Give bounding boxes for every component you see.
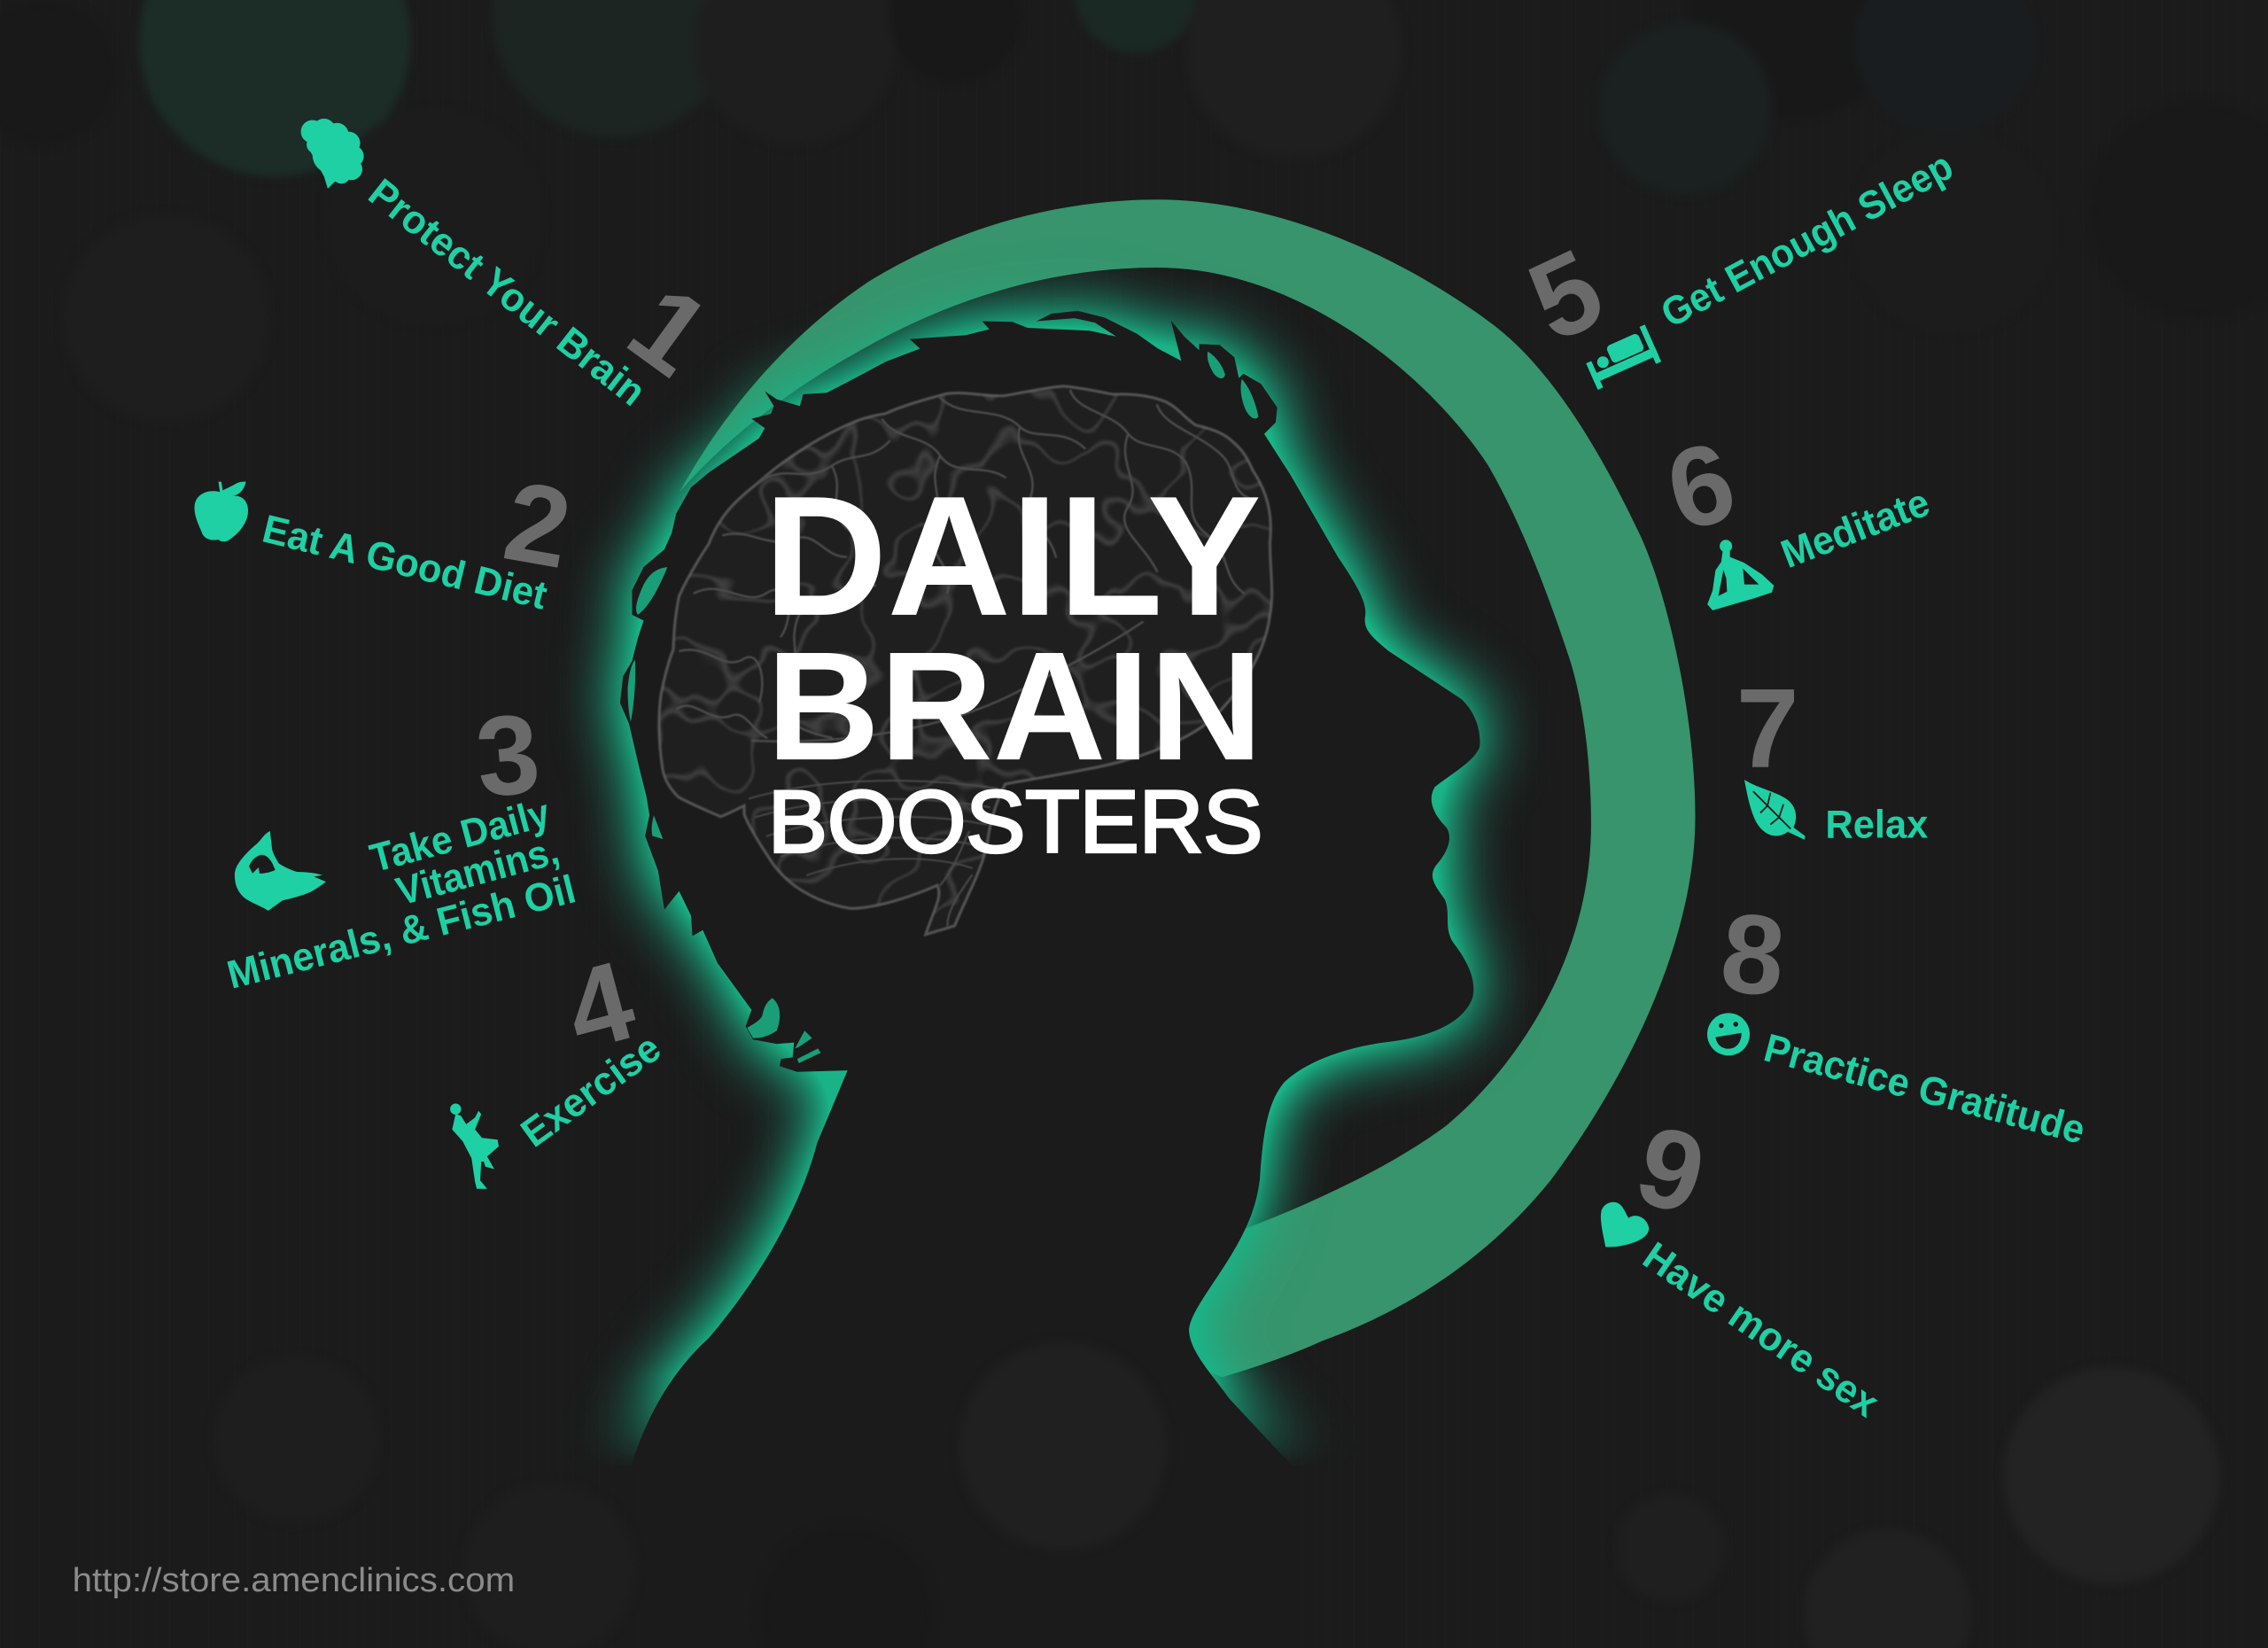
- number 1: 1: [607, 261, 732, 400]
- number 6: 6: [1654, 417, 1747, 555]
- label: Get Enough Sleep: [1653, 143, 1960, 336]
- label: Meditate: [1775, 479, 1936, 577]
- label: Minerals, & Fish Oil: [222, 866, 580, 998]
- item 8: Practice Gratitude: [1707, 889, 2090, 1153]
- number 7: 7: [1736, 665, 1799, 790]
- icon: meditating figure: [1707, 540, 1774, 610]
- number 2: 2: [496, 457, 579, 592]
- hair wisps: [628, 352, 1258, 1063]
- icon: leaf: [1744, 780, 1806, 840]
- item 4: Exercise: [450, 937, 669, 1189]
- label: Take Daily: [365, 789, 555, 881]
- number 5: 5: [1511, 225, 1620, 365]
- item 9: Have more sex: [1601, 1100, 1887, 1426]
- label: Eat A Good Diet: [259, 506, 552, 618]
- icon: bed: [1581, 324, 1661, 390]
- icon: runner: [450, 1104, 499, 1189]
- item 1: Protect Your Brain: [301, 119, 732, 415]
- gyri texture: [659, 390, 1271, 913]
- item 5: Get Enough Sleep: [1511, 143, 1960, 390]
- title line: BOOSTERS: BOOSTERS: [768, 773, 1262, 872]
- label: Exercise: [512, 1025, 669, 1155]
- label: [222, 789, 580, 998]
- footer url: http://store.amenclinics.com: [73, 1561, 515, 1598]
- brain gyri: [677, 391, 1251, 926]
- ribbon arc around head: [680, 199, 1695, 1377]
- brain illustration: [657, 385, 1274, 937]
- icon: fish: [235, 831, 326, 911]
- number 8: 8: [1716, 889, 1790, 1020]
- icon: heart: [1601, 1202, 1649, 1247]
- number 4: 4: [553, 937, 647, 1074]
- item 3: Take Daily Vitamins, Minerals, & Fish Oil: [222, 690, 580, 998]
- brain outline: [659, 386, 1272, 935]
- label: Practice Gratitude: [1759, 1024, 2090, 1153]
- item 2: Eat A Good Diet: [195, 457, 579, 618]
- number 3: 3: [471, 690, 545, 820]
- head silhouette: [620, 311, 1480, 1648]
- icon: smiley: [1707, 1013, 1750, 1055]
- title line: BRAIN: BRAIN: [766, 620, 1262, 793]
- item 7: Relax: [1736, 665, 1928, 846]
- icon: apple: [195, 482, 248, 541]
- icon: brain: [301, 119, 364, 189]
- title: [764, 461, 1262, 872]
- label: Protect Your Brain: [361, 169, 655, 415]
- label: Relax: [1825, 801, 1928, 846]
- label: Vitamins,: [392, 828, 563, 914]
- head glow: [620, 311, 1480, 1648]
- item 6: Meditate: [1654, 417, 1936, 610]
- title line: DAILY: DAILY: [764, 461, 1262, 651]
- label: Have more sex: [1635, 1233, 1887, 1426]
- number 9: 9: [1625, 1100, 1718, 1239]
